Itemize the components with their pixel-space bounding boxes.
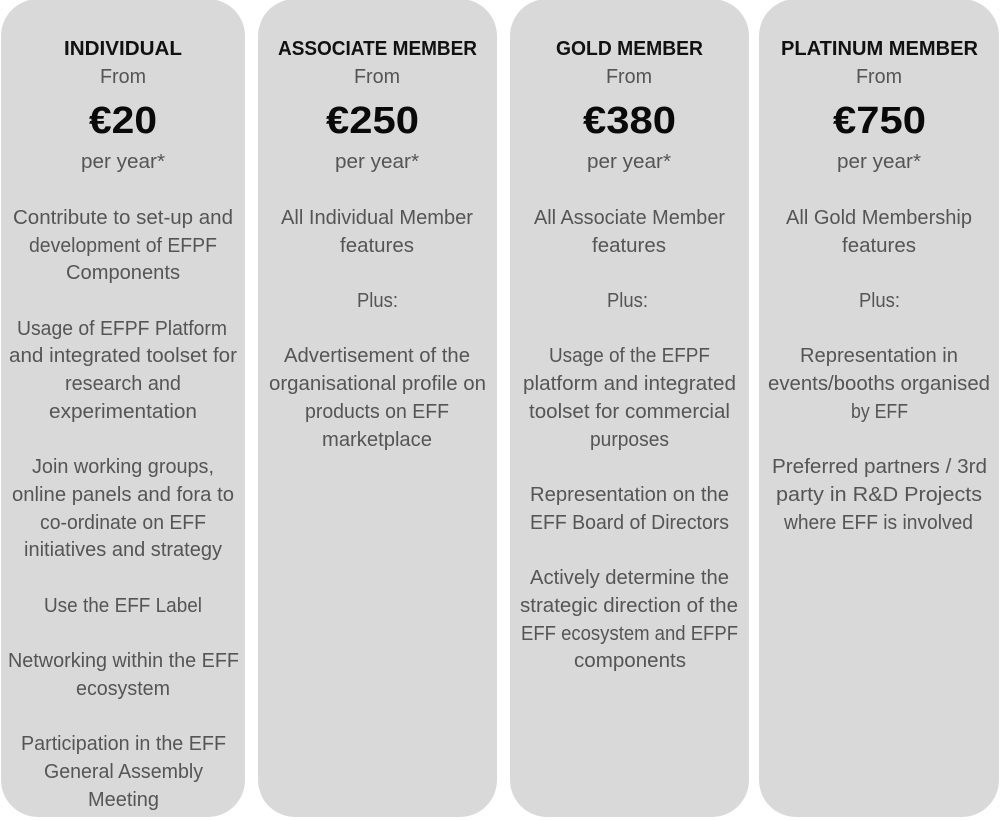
features: gold member: features (592, 235, 666, 257)
price: platinum member: €750 (833, 100, 926, 142)
features: individual: General Assembly (44, 761, 203, 783)
price: associate member: €250 (326, 100, 419, 142)
features: individual: Usage of EFPF Platform (17, 318, 227, 340)
features: individual: initiatives and strategy (24, 539, 222, 561)
price: gold member: per year* (587, 151, 671, 173)
features: platinum member (768, 207, 990, 534)
features: individual: Networking within the EFF (8, 650, 239, 672)
features: platinum member: features (842, 235, 916, 257)
features: platinum member: Representation in (800, 345, 958, 367)
features: platinum member: where EFF is involved (783, 512, 973, 534)
features: associate member: Plus: (357, 290, 398, 312)
features: individual: Meeting (88, 789, 159, 811)
features: gold member: purposes (590, 429, 669, 451)
features: platinum member: events/booths organised (768, 373, 990, 395)
features: associate member (269, 207, 486, 451)
features: individual: Use the EFF Label (44, 595, 202, 617)
price: gold member: From (606, 66, 652, 88)
price: individual: €20 (89, 100, 157, 142)
panel: associate member (258, 0, 497, 817)
features: individual: Participation in the EFF (21, 733, 226, 755)
price: associate member: per year* (335, 151, 419, 173)
features: associate member: features (340, 235, 414, 257)
features: individual: experimentation (49, 401, 197, 423)
price: individual (81, 66, 165, 173)
price: platinum member (833, 66, 926, 173)
price: individual: From (100, 66, 146, 88)
price: associate member: From (354, 66, 400, 88)
features: individual: ecosystem (76, 678, 170, 700)
price: platinum member: per year* (837, 151, 921, 173)
price: associate member (326, 66, 419, 173)
features: individual: development of EFPF (29, 235, 217, 257)
features: gold member: Usage of the EFPF (549, 345, 710, 367)
features: associate member: marketplace (322, 429, 432, 451)
panel: platinum member (759, 0, 999, 817)
features: individual: research and (65, 373, 181, 395)
price: individual: per year* (81, 151, 165, 173)
features: gold member: toolset for commercial (529, 401, 730, 423)
features: individual: and integrated toolset for (9, 345, 237, 367)
heading: platinum member: PLATINUM MEMBER (781, 38, 979, 60)
features: platinum member: Preferred partners / 3rd (772, 456, 987, 478)
features: individual: online panels and fora to (12, 484, 234, 506)
features: associate member: All Individual Member (281, 207, 473, 229)
features: associate member: organisational profile on (269, 373, 486, 395)
features: individual (8, 207, 239, 811)
panel: gold member (510, 0, 749, 817)
price: gold member (583, 66, 676, 173)
features: individual: co-ordinate on EFF (40, 512, 206, 534)
features: associate member: Advertisement of the (284, 345, 470, 367)
features: platinum member: party in R&D Projects (776, 484, 982, 506)
features: platinum member: by EFF (851, 401, 908, 423)
features: gold member (520, 207, 738, 672)
features: gold member: EFF ecosystem and EFPF (521, 623, 738, 645)
panel: individual (1, 0, 245, 817)
features: platinum member: Plus: (859, 290, 900, 312)
features: gold member: Actively determine the (530, 567, 729, 589)
heading: individual: INDIVIDUAL (64, 38, 182, 60)
features: gold member: Representation on the (530, 484, 729, 506)
features: platinum member: All Gold Membership (786, 207, 972, 229)
features: individual: Contribute to set-up and (13, 207, 233, 229)
price: platinum member: From (856, 66, 902, 88)
heading: gold member: GOLD MEMBER (556, 38, 704, 60)
features: gold member: Plus: (607, 290, 648, 312)
features: gold member: All Associate Member (534, 207, 725, 229)
features: associate member: products on EFF (305, 401, 449, 423)
features: gold member: platform and integrated (523, 373, 736, 395)
features: individual: Join working groups, (32, 456, 214, 478)
heading: associate member: ASSOCIATE MEMBER (278, 38, 478, 60)
features: individual: Components (66, 262, 180, 284)
features: gold member: EFF Board of Directors (530, 512, 729, 534)
price: gold member: €380 (583, 100, 676, 142)
features: gold member: strategic direction of the (520, 595, 738, 617)
features: gold member: components (574, 650, 686, 672)
